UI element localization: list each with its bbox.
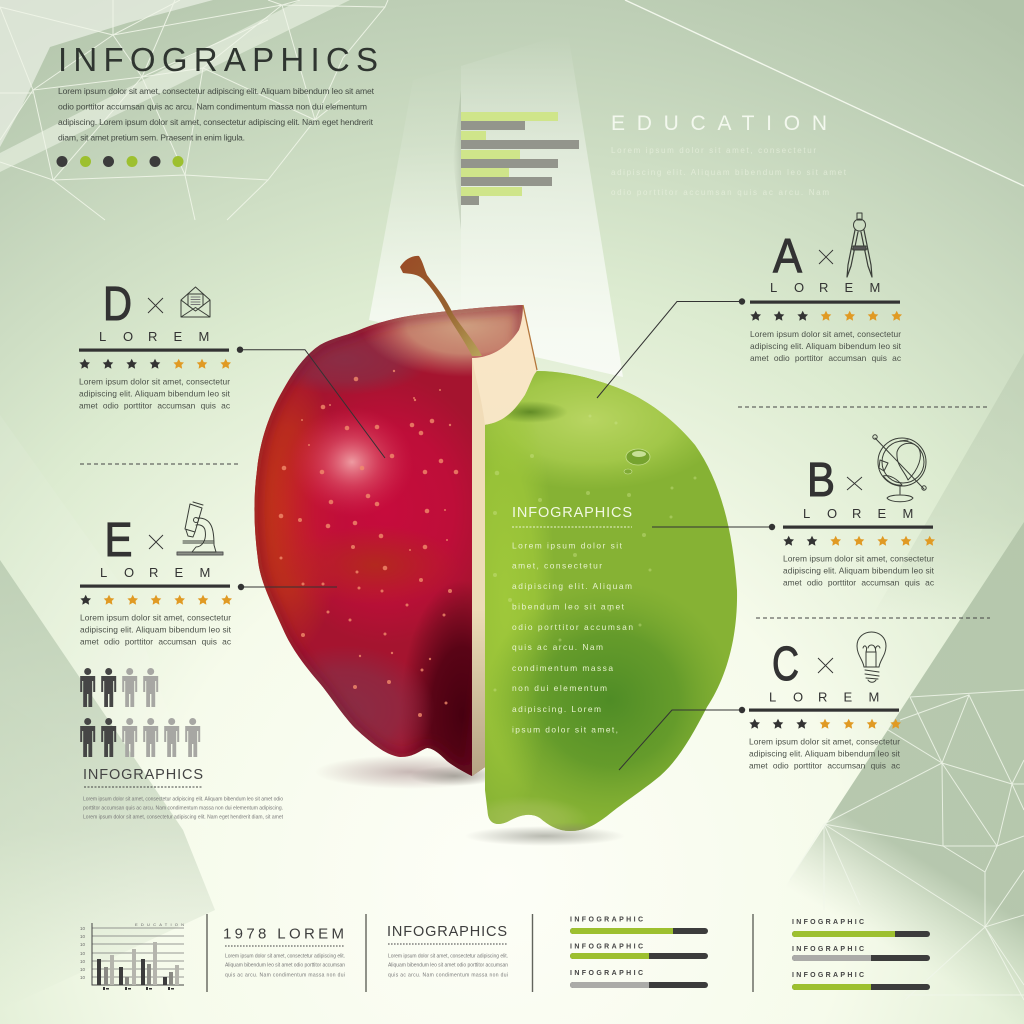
intro text	[58, 86, 375, 142]
progress bars: column 1	[570, 916, 708, 988]
panel: D	[79, 278, 231, 410]
block: 1978 lorem: quis ac arcu. Nam condimentum massa non dui	[225, 972, 345, 978]
letter B: B	[807, 454, 835, 507]
leader line E	[238, 584, 337, 590]
times sign	[847, 477, 862, 490]
green panel heading: INFOGRAPHICS	[512, 505, 632, 521]
block: 1978 lorem: Lorem ipsum dolor sit amet, consectetur adipiscing elit.	[225, 954, 345, 960]
icon: microscope	[177, 502, 223, 555]
green panel text: odio porttitor accumsan	[512, 622, 633, 632]
apple shadow	[315, 755, 625, 846]
icon: compass	[847, 213, 872, 277]
leader line A	[597, 298, 745, 398]
icon: globe	[873, 435, 926, 502]
green panel text: bibendum leo sit amet	[512, 602, 625, 612]
description	[79, 376, 231, 410]
rule	[783, 526, 933, 529]
letter C: C	[772, 638, 799, 691]
bottom bar chart: EDUCATION	[135, 922, 184, 927]
dots row	[56, 156, 184, 167]
education text: adipiscing elit. Aliquam bibendum leo sit amet	[611, 168, 847, 177]
times sign	[819, 250, 833, 264]
green panel text: quis ac arcu. Nam	[512, 642, 603, 652]
green panel text: non dui elementum	[512, 683, 607, 693]
letter A: A	[773, 230, 802, 283]
green panel divider	[512, 526, 632, 528]
letter E: E	[104, 514, 132, 567]
rule	[749, 708, 899, 712]
icon: light bulb	[857, 632, 886, 682]
block: infographics: Lorem ipsum dolor sit amet, consectetur adipiscing elit.	[388, 954, 508, 960]
description: amet odio porttitor accumsan quis ac	[749, 760, 900, 770]
green panel text: ipsum dolor sit amet,	[512, 724, 618, 734]
block: infographics: INFOGRAPHICS	[387, 924, 507, 940]
progress bars: column 1: INFOGRAPHIC	[570, 970, 643, 977]
rule	[80, 584, 230, 588]
star rating	[749, 719, 901, 729]
bottom bar chart: 10	[80, 959, 86, 964]
people text: porttitor accumsan quis ac arcu. Nam condimentum massa non dui elementum adipiscing.	[83, 806, 283, 812]
people divider	[84, 786, 203, 788]
green panel text: adipiscing. Lorem	[512, 704, 601, 714]
leader line B	[652, 524, 775, 530]
progress bars: column 2: INFOGRAPHIC	[792, 946, 864, 953]
education text: odio porttitor accumsan quis ac arcu. Nam	[611, 188, 829, 197]
title: INFOGRAPHICS	[58, 41, 378, 78]
description: Lorem ipsum dolor sit amet, consectetur	[80, 612, 231, 622]
mesh top-left	[0, 0, 388, 220]
description: adipiscing elit. Aliquam bibendum leo sit	[80, 624, 232, 634]
bottom bar chart: 10	[80, 926, 86, 931]
block: infographics: Aliquam bibendum leo sit amet odio porttitor accumsan	[388, 962, 508, 968]
description: adipiscing elit. Aliquam bibendum leo sit	[750, 341, 902, 351]
apple: green half	[485, 371, 738, 831]
progress bars: column 1: INFOGRAPHIC	[570, 916, 643, 924]
rule	[79, 348, 229, 352]
panel: C	[749, 632, 901, 770]
description	[783, 554, 935, 588]
block: 1978 lorem: Aliquam bibendum leo sit amet odio porttitor accumsan	[225, 962, 345, 968]
mesh bottom-right	[790, 690, 1024, 1000]
lorem label: LOREM	[803, 506, 913, 521]
description: Lorem ipsum dolor sit amet, consectetur	[749, 736, 900, 746]
star rating	[79, 359, 231, 369]
description: Lorem ipsum dolor sit amet, consectetur	[783, 554, 934, 564]
panel: A	[750, 213, 902, 363]
description	[80, 612, 232, 646]
bottom bar chart: 10	[80, 975, 86, 980]
intro text: odio porttitor accumsan quis ac arcu. Nam condimentum massa non dui elementum	[58, 102, 367, 112]
bar chart: top	[461, 112, 579, 205]
letter D: D	[103, 278, 132, 331]
block: 1978 lorem: 1978 LOREM	[223, 926, 344, 942]
rule	[750, 300, 900, 304]
apple: red half	[254, 305, 537, 776]
description: adipiscing elit. Aliquam bibendum leo sit	[749, 748, 901, 758]
description: amet odio porttitor accumsan quis ac	[783, 578, 934, 588]
green panel text: condimentum massa	[512, 663, 613, 673]
water droplet	[624, 449, 650, 474]
lorem label: LOREM	[100, 565, 210, 580]
pictogram chart: people	[80, 668, 200, 757]
bottom bar chart	[80, 922, 184, 990]
intro text: Lorem ipsum dolor sit amet, consectetur adipiscing elit. Aliquam bibendum leo sit amet	[58, 86, 375, 96]
icon: envelope	[181, 287, 210, 317]
apple: cut face	[472, 305, 537, 776]
description: Lorem ipsum dolor sit amet, consectetur	[750, 329, 901, 339]
lorem label: LOREM	[770, 280, 880, 295]
intro text: diam, sit amet pretium sem. Praesent in enim ligula.	[58, 132, 245, 142]
progress bars: column 2: INFOGRAPHIC	[792, 919, 864, 926]
apple: stem	[400, 256, 482, 356]
panel: B	[783, 435, 935, 588]
leader line D	[237, 346, 385, 458]
block: infographics	[387, 924, 508, 978]
block: infographics: quis ac arcu. Nam condimentum massa non dui	[388, 972, 508, 978]
lorem label: LOREM	[769, 690, 879, 704]
description: adipiscing elit. Aliquam bibendum leo sit	[783, 566, 935, 576]
star rating	[783, 536, 935, 546]
leader line C	[619, 707, 745, 770]
star rating	[80, 595, 232, 605]
green panel text: Lorem ipsum dolor sit	[512, 540, 623, 550]
bottom bar chart: 10	[80, 942, 86, 947]
description: amet odio porttitor accumsan quis ac	[750, 353, 901, 363]
education text	[611, 146, 847, 197]
bottom bar chart: 10	[80, 951, 86, 956]
intro text: adipiscing. Lorem ipsum dolor sit amet, consectetur adipiscing elit. Nam eget hendrerit	[58, 117, 374, 127]
times sign	[149, 535, 163, 549]
description: amet odio porttitor accumsan quis ac	[79, 400, 230, 410]
times sign	[148, 298, 163, 313]
bottom bar chart: 10	[80, 934, 86, 939]
people text: Lorem ipsum dolor sit amet, consectetur adipiscing elit. Aliquam bibendum leo sit amet odio	[83, 796, 283, 802]
progress bars: column 1: INFOGRAPHIC	[570, 944, 643, 950]
star rating	[750, 311, 902, 321]
progress bars: column 2	[792, 919, 930, 990]
description	[750, 329, 902, 363]
green panel text: adipiscing elit. Aliquam	[512, 581, 632, 591]
green panel text	[512, 540, 633, 734]
education text: Lorem ipsum dolor sit amet, consectetur	[611, 146, 816, 155]
panel: E	[80, 502, 232, 646]
people text	[83, 796, 284, 820]
description: Lorem ipsum dolor sit amet, consectetur	[79, 376, 230, 386]
lorem label: LOREM	[99, 329, 209, 344]
bottom bar chart: 10	[80, 967, 86, 972]
people text: Lorem ipsum dolor sit amet, consectetur adipiscing elit. Nam eget hendrerit diam, sit amet	[83, 814, 284, 820]
progress bars: column 2: INFOGRAPHIC	[792, 972, 864, 979]
description: adipiscing elit. Aliquam bibendum leo sit	[79, 388, 231, 398]
education heading: EDUCATION	[611, 112, 827, 135]
block: 1978 lorem	[223, 926, 345, 978]
green panel text: amet, consectetur	[512, 561, 602, 571]
times sign	[818, 658, 833, 673]
people heading: INFOGRAPHICS	[83, 767, 203, 783]
description: amet odio porttitor accumsan quis ac	[80, 636, 231, 646]
description	[749, 736, 901, 770]
